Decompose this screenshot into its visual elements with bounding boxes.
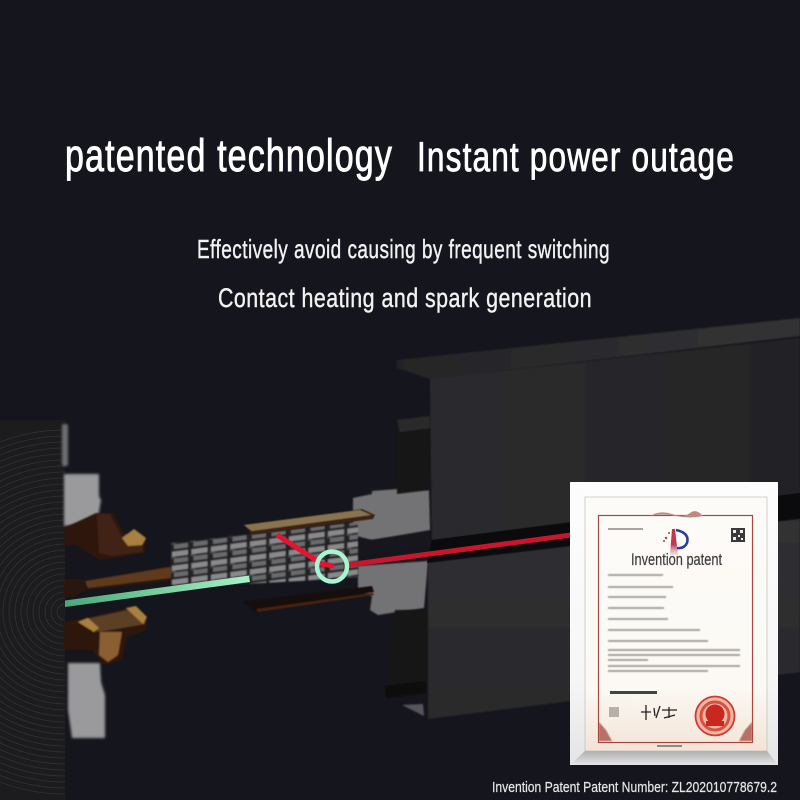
patent certificate in frame bbox=[570, 482, 778, 765]
middle left contact bbox=[64, 566, 208, 597]
left rail end with concentric rings bbox=[0, 430, 65, 794]
red power path bbox=[277, 534, 575, 566]
certificate paper bbox=[585, 497, 767, 751]
frame bbox=[570, 482, 778, 765]
red border bbox=[598, 516, 752, 742]
right rail upper section bbox=[397, 318, 800, 540]
signature labels bbox=[609, 707, 619, 717]
title: patented technology: patented technology bbox=[65, 130, 393, 181]
certificate number line bbox=[608, 528, 643, 530]
left white connector blocks bbox=[62, 424, 105, 738]
contact point ring bbox=[317, 552, 347, 582]
bottom copper bar bbox=[243, 586, 374, 612]
patent logo bbox=[663, 529, 688, 555]
lower left clip bbox=[64, 606, 147, 665]
corner ornaments bbox=[599, 722, 752, 741]
red seal bbox=[696, 696, 734, 736]
top ornament bbox=[650, 511, 703, 518]
QR code bbox=[731, 528, 745, 542]
certificate body lines bbox=[608, 574, 740, 672]
black channel between rails bbox=[427, 493, 800, 563]
footer text line bbox=[657, 745, 682, 747]
brick stack bbox=[171, 522, 358, 587]
right rail, inner channel bbox=[385, 416, 430, 716]
upper left clip bbox=[64, 513, 146, 560]
subtitle line two: Contact heating and spark generation bbox=[218, 283, 592, 313]
white connector blocks right bbox=[353, 488, 430, 615]
left copper contacts bbox=[64, 513, 208, 665]
barcode bbox=[610, 691, 657, 694]
signature bbox=[641, 705, 677, 720]
top copper bar bbox=[244, 509, 375, 535]
certificate heading: Invention patent bbox=[631, 550, 722, 569]
subtitle line one: Effectively avoid causing by frequent switching bbox=[197, 234, 610, 264]
dark rear bricks bbox=[355, 533, 430, 556]
central contact bar stack bbox=[171, 488, 430, 615]
right rail lower section bbox=[428, 519, 800, 719]
green power path bbox=[65, 576, 250, 607]
